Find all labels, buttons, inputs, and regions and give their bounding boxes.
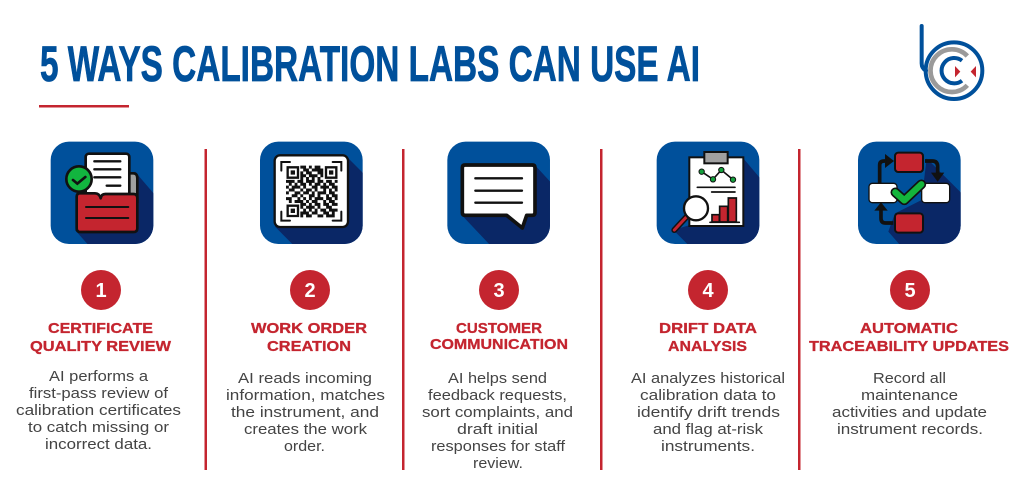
body text: AI analyzes historical — [631, 371, 785, 387]
heading: AUTOMATIC — [860, 320, 958, 337]
body text: review. — [473, 456, 523, 472]
heading: COMMUNICATION — [430, 336, 568, 353]
heading — [30, 320, 172, 355]
number badge 4: 4 — [702, 280, 714, 302]
number badge 1 — [81, 270, 121, 310]
body text: creates the work — [244, 422, 368, 438]
number badge 5: 5 — [904, 280, 916, 302]
heading: CERTIFICATE — [48, 320, 153, 337]
heading — [430, 320, 568, 353]
heading: WORK ORDER — [251, 320, 367, 337]
body text: AI helps send — [448, 371, 547, 387]
body text: identify drift trends — [637, 405, 780, 421]
number badge 2 — [290, 270, 330, 310]
body text: feedback requests, — [428, 388, 567, 404]
body text — [226, 371, 385, 455]
heading: QUALITY REVIEW — [30, 338, 172, 355]
heading: CREATION — [267, 338, 351, 355]
icon: QR code — [260, 142, 365, 245]
body text: information, matches — [226, 388, 385, 404]
body text: activities and update — [832, 405, 987, 421]
logo — [922, 26, 982, 99]
body text: incorrect data. — [45, 437, 152, 453]
icon: speech bubble — [447, 142, 552, 245]
body text: calibration data to — [640, 388, 776, 404]
body text — [422, 371, 573, 472]
panel: automatic traceability updates — [809, 142, 1009, 438]
heading: TRACEABILITY UPDATES — [809, 338, 1009, 355]
body text: first-pass review of — [29, 386, 169, 402]
body text: instrument records. — [837, 422, 983, 438]
body text — [631, 371, 785, 455]
heading: DRIFT DATA — [659, 320, 757, 337]
body text — [16, 369, 181, 453]
number badge 3 — [479, 270, 519, 310]
number badge 1: 1 — [95, 280, 107, 302]
body text: order. — [284, 439, 325, 455]
body text: draft initial — [457, 422, 538, 438]
body text: AI performs a — [49, 369, 149, 385]
icon: clipboard with chart and magnifier — [657, 142, 762, 245]
heading — [251, 320, 367, 355]
panel: drift data analysis — [631, 142, 785, 455]
body text: and flag at-risk — [653, 422, 764, 438]
body text: sort complaints, and — [422, 405, 573, 421]
heading: CUSTOMER — [456, 320, 542, 337]
number badge 2: 2 — [304, 280, 316, 302]
body text: Record all — [873, 371, 946, 387]
heading — [659, 320, 757, 355]
body text: responses for staff — [431, 439, 566, 455]
body text: calibration certificates — [16, 403, 181, 419]
body text: AI reads incoming — [238, 371, 372, 387]
number badge 3: 3 — [493, 280, 505, 302]
icon: folder with certificate — [51, 142, 155, 245]
title: 5 WAYS CALIBRATION LABS CAN USE AI — [40, 36, 700, 92]
panel: work order creation — [226, 142, 385, 455]
heading — [809, 320, 1009, 355]
number badge 5 — [890, 270, 930, 310]
title underline — [39, 105, 129, 108]
icon: workflow cycle with check — [858, 142, 962, 245]
panel: customer communication — [422, 142, 573, 472]
body text — [832, 371, 987, 438]
body text: maintenance — [861, 388, 958, 404]
heading: ANALYSIS — [668, 338, 747, 355]
body text: instruments. — [661, 439, 755, 455]
panel: certificate quality review — [16, 142, 181, 453]
number badge 4 — [688, 270, 728, 310]
body text: the instrument, and — [231, 405, 379, 421]
body text: to catch missing or — [28, 420, 169, 436]
